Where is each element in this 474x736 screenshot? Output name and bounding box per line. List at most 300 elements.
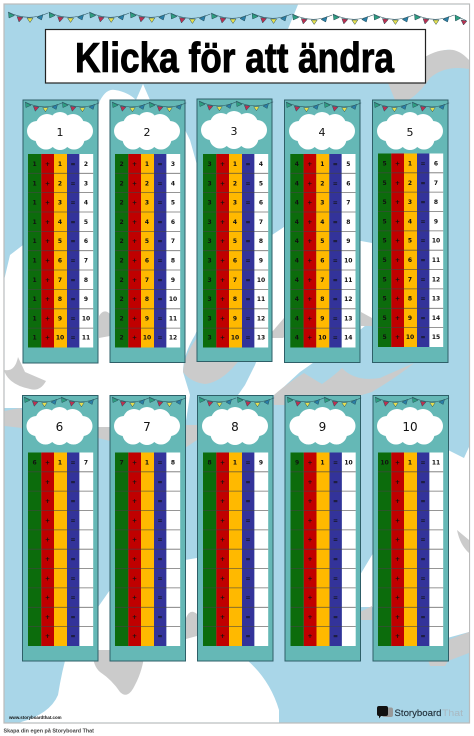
card 10: 1 [408, 460, 412, 466]
card 7: = [157, 498, 163, 505]
card 4: 9 [346, 238, 350, 245]
card 3: + [220, 219, 225, 226]
card 1: + [45, 335, 50, 342]
card 4: 4 [320, 219, 324, 226]
card 10: + [395, 460, 400, 466]
card 3: = [245, 335, 251, 342]
card 8: + [220, 498, 225, 505]
card 8: + [220, 556, 225, 563]
card 1: = [70, 277, 76, 284]
card 4: + [307, 258, 312, 264]
card 2: + [132, 258, 137, 264]
card 6: + [45, 575, 50, 582]
card 4: + [307, 200, 312, 207]
card 3: 3 [208, 161, 212, 168]
logo: Storyboard That [377, 706, 464, 718]
card 7: + [132, 614, 137, 621]
card 5: 9 [408, 315, 412, 322]
card 2: 5 [145, 238, 149, 245]
card 5: + [395, 160, 400, 168]
card 7: + [132, 479, 137, 486]
card 3: + [220, 180, 225, 187]
card 4: = [333, 200, 338, 207]
card 6: = [70, 517, 76, 524]
card 2: 8 [171, 258, 175, 264]
card 2: 2 [120, 335, 124, 342]
card 9: 10 [344, 460, 353, 466]
card 10: + [395, 595, 400, 602]
card 9: + [307, 556, 313, 563]
card 3: = [245, 258, 251, 264]
card 4: = [333, 238, 338, 245]
card 5: = [420, 180, 426, 187]
card 2: + [132, 277, 137, 284]
card 2: 1 [145, 161, 149, 168]
card 4: 6 [346, 180, 350, 187]
card 10: = [420, 614, 426, 621]
card 5: 5 [406, 126, 414, 139]
card 9: = [333, 479, 338, 486]
card 3: 3 [208, 180, 212, 187]
card 1: 1 [56, 126, 64, 139]
card 5 [372, 100, 449, 362]
card 10: + [395, 517, 400, 524]
card 5: 2 [408, 180, 412, 187]
card 5: 5 [383, 199, 387, 206]
card 1: + [45, 296, 50, 303]
card 6: = [70, 479, 76, 486]
card 4: = [333, 277, 338, 284]
card 2: 9 [171, 277, 175, 284]
card 10: = [420, 537, 426, 544]
card 2: 5 [171, 200, 175, 207]
card 7: = [157, 595, 163, 602]
card 1: 1 [33, 161, 37, 168]
card 1: 1 [33, 258, 37, 264]
card 1: 1 [33, 315, 37, 322]
card 7: + [132, 633, 137, 640]
card 1: 3 [58, 200, 62, 207]
card 5: 13 [432, 296, 440, 303]
card 8: + [220, 517, 225, 524]
card 10: + [395, 633, 400, 640]
card 3: 5 [233, 238, 237, 245]
card 5: 8 [434, 199, 438, 206]
card 8: = [245, 537, 251, 544]
card 4: + [307, 315, 312, 322]
card 6: 6 [33, 460, 37, 466]
card 7: = [157, 517, 163, 524]
card 1: + [45, 315, 50, 322]
card 1: 7 [58, 277, 62, 284]
card 3: 3 [208, 296, 212, 303]
card 6: + [45, 633, 50, 640]
card 5: 5 [383, 276, 387, 283]
card 4: 1 [320, 161, 324, 168]
logo: Storyboard That: That [442, 708, 464, 718]
card 4: = [333, 161, 338, 168]
card 3: 3 [208, 258, 212, 264]
card 2: 7 [145, 277, 149, 284]
card 2: 3 [145, 200, 149, 207]
card 6: 6 [56, 420, 63, 434]
card 7: 7 [143, 420, 151, 434]
card 8: = [245, 556, 251, 563]
card 3: 3 [208, 315, 212, 322]
card 5: 4 [408, 218, 412, 225]
card 6: = [70, 614, 76, 621]
card 4: = [333, 296, 338, 303]
card 10: = [420, 498, 426, 505]
top bunting [8, 12, 467, 25]
card 3: 8 [259, 238, 263, 245]
card 7: + [132, 460, 137, 466]
card 1: 4 [84, 200, 88, 207]
website url: www.storyboardthat.com [8, 715, 62, 720]
card 2: = [157, 161, 163, 168]
card 5: = [420, 257, 426, 264]
card 4: + [307, 335, 312, 342]
card 8: = [245, 633, 251, 640]
title: Klicka för att ändra [75, 34, 395, 81]
card 9: 9 [319, 420, 326, 434]
card 1: 1 [33, 335, 37, 342]
card 4: 10 [344, 258, 352, 264]
card 8: = [245, 517, 251, 524]
card 3: = [245, 200, 251, 207]
card 4: 10 [318, 335, 326, 342]
card 10: + [395, 479, 400, 486]
card 10: + [395, 556, 400, 563]
card 1: 2 [58, 180, 62, 187]
card 3: 10 [231, 335, 239, 342]
card 7: + [132, 556, 137, 563]
card 5: + [395, 199, 400, 206]
card 1: + [45, 200, 50, 207]
card 5: = [420, 334, 426, 341]
card 2: = [157, 258, 163, 264]
card 10: + [395, 575, 400, 582]
card 5: + [395, 180, 400, 187]
card 3: = [245, 296, 251, 303]
card 6: + [45, 614, 50, 621]
card 2: 10 [169, 296, 177, 303]
card 10: 10 [380, 460, 389, 466]
card 9: = [333, 633, 338, 640]
card 8: + [220, 460, 225, 466]
card 1: + [45, 277, 50, 284]
card 8: 8 [231, 420, 239, 434]
card 3: 8 [233, 296, 237, 303]
card 2: = [157, 335, 163, 342]
card 5: 5 [383, 238, 387, 245]
card 2: 4 [171, 180, 175, 187]
card 9: + [307, 633, 313, 640]
card 2: 6 [171, 219, 175, 226]
card 3: + [220, 161, 225, 168]
card 1: + [45, 219, 50, 226]
card 8: = [245, 614, 251, 621]
card 4: 4 [318, 126, 326, 139]
card 8: = [245, 460, 251, 466]
card 6: + [45, 460, 50, 466]
card 5: 5 [383, 180, 387, 187]
card 4: + [307, 296, 312, 303]
card 5: 12 [432, 276, 440, 283]
card 7: + [132, 537, 137, 544]
card 5: 5 [383, 257, 387, 264]
card 2: 12 [169, 335, 177, 342]
card 3: = [245, 238, 251, 245]
card 10: = [420, 517, 426, 524]
card 2: = [157, 277, 163, 284]
card 4: 8 [346, 219, 350, 226]
card 1: 1 [33, 219, 37, 226]
card 2: + [132, 219, 137, 226]
card 3: 13 [257, 335, 265, 342]
card 4: 4 [295, 219, 299, 226]
card 7: 8 [171, 460, 175, 466]
card 5: 5 [408, 238, 412, 245]
card 9: = [333, 517, 338, 524]
card 5: 15 [432, 334, 440, 341]
card 4: + [307, 277, 312, 284]
card 3: 3 [208, 238, 212, 245]
card 3: = [245, 180, 251, 187]
card 2: 2 [120, 296, 124, 303]
card 4: 4 [295, 296, 299, 303]
card 1: + [45, 238, 50, 245]
card 5: 5 [383, 160, 387, 168]
card 1: = [70, 161, 76, 168]
card 8: + [220, 595, 225, 602]
card 2: 2 [120, 161, 124, 168]
card 2: 2 [120, 277, 124, 284]
card 9: 1 [320, 460, 325, 466]
card 5: + [395, 257, 400, 264]
card 8: = [245, 498, 251, 505]
card 4: 4 [295, 277, 299, 284]
card 3 [197, 99, 273, 362]
card 1: = [70, 238, 76, 245]
card 3: 5 [259, 180, 263, 187]
card 2: + [132, 180, 137, 187]
card 7: 7 [120, 460, 124, 466]
card 1: 10 [56, 335, 64, 342]
card 9: + [307, 479, 313, 486]
card 9: + [307, 537, 313, 544]
card 10: = [420, 595, 426, 602]
card 1: 11 [82, 335, 90, 342]
card 4: 6 [320, 258, 324, 264]
card 3: + [220, 258, 225, 264]
card 8: + [220, 633, 225, 640]
card 5: 10 [432, 238, 440, 245]
card 10: = [420, 460, 426, 466]
card 1: = [70, 200, 76, 207]
card 5: 5 [383, 315, 387, 322]
card 7: 1 [145, 460, 149, 466]
card 2: + [132, 296, 137, 303]
card 2: = [157, 238, 163, 245]
card 1: 8 [58, 296, 62, 303]
card 7: = [157, 537, 163, 544]
card 5: 6 [434, 160, 438, 168]
card 8: = [245, 595, 251, 602]
card 5: + [395, 276, 400, 283]
card 1: = [70, 296, 76, 303]
card 2: 2 [120, 200, 124, 207]
card 4: + [307, 219, 312, 226]
card 5: 5 [383, 218, 387, 225]
card 1: = [70, 315, 76, 322]
card 5: 8 [408, 296, 412, 303]
card 3: 2 [233, 180, 237, 187]
card 5: 5 [383, 334, 387, 341]
card 2: 2 [120, 258, 124, 264]
card 6: + [45, 537, 50, 544]
card 10: = [420, 633, 426, 640]
card 8: = [245, 479, 251, 486]
card 6: = [70, 595, 76, 602]
card 2: 10 [143, 335, 151, 342]
logo: Storyboard That: Storyboard [394, 708, 442, 718]
card 5: + [395, 218, 400, 225]
card 2: 2 [144, 126, 150, 139]
card 5: 14 [432, 315, 440, 322]
card 5: 5 [383, 296, 387, 303]
card 2: 2 [145, 180, 149, 187]
card 10: + [395, 614, 400, 621]
card 2: 9 [145, 315, 149, 322]
card 5: = [420, 218, 426, 225]
card 5: 7 [408, 276, 412, 283]
card 8: 1 [233, 460, 237, 466]
card 4: 5 [320, 238, 324, 245]
card 4: + [307, 238, 312, 245]
card 4: + [307, 180, 312, 187]
card 6: 1 [58, 460, 62, 466]
card 6: = [70, 460, 76, 466]
card 2: = [157, 296, 163, 303]
card 5: = [420, 315, 426, 322]
card 7: = [157, 556, 163, 563]
card 6: + [45, 556, 50, 563]
card 4: 12 [344, 296, 352, 303]
card 1: = [70, 258, 76, 264]
card 1: 5 [58, 238, 62, 245]
card 1: 1 [33, 180, 37, 187]
card 1: + [45, 258, 50, 264]
card 2: 2 [120, 219, 124, 226]
card 2: 11 [169, 315, 177, 322]
card 3: + [220, 315, 225, 322]
card 3: + [220, 200, 225, 207]
card 8: 8 [208, 460, 212, 466]
card 10: 11 [432, 460, 440, 466]
card 5: + [395, 296, 400, 303]
card 5: = [420, 160, 426, 168]
card 5: 11 [432, 257, 440, 264]
card 3: 12 [257, 315, 265, 322]
card 8: + [220, 537, 225, 544]
card 2: = [157, 315, 163, 322]
card 1: + [45, 180, 50, 187]
card 7: = [157, 575, 163, 582]
card 4: 3 [320, 200, 324, 207]
card 3: = [245, 315, 251, 322]
card 9: = [333, 595, 338, 602]
card 6: = [70, 575, 76, 582]
card 3: 3 [233, 200, 237, 207]
card 7: + [132, 595, 137, 602]
card 3: + [220, 277, 225, 284]
card 1: 7 [84, 258, 88, 264]
card 2: 7 [171, 238, 175, 245]
card 9: = [333, 498, 338, 505]
card 7: = [157, 479, 163, 486]
card 7: + [132, 517, 137, 524]
card 2: + [132, 315, 137, 322]
card 2: = [157, 180, 163, 187]
card 7: + [132, 575, 137, 582]
card 5: + [395, 334, 400, 341]
card 2: 4 [145, 219, 149, 226]
card 3: 3 [230, 125, 238, 138]
card 1: 10 [82, 315, 90, 322]
card 2 [110, 100, 186, 362]
card 1: 5 [84, 219, 88, 226]
card 5: 7 [434, 180, 438, 187]
card 9: 9 [295, 460, 299, 466]
card 5: 3 [408, 199, 412, 206]
card 3: 3 [208, 335, 212, 342]
card 9: = [333, 537, 338, 544]
card 3: 4 [233, 219, 237, 226]
card 3: 10 [257, 277, 265, 284]
card 3: 3 [208, 277, 212, 284]
card 4: = [333, 180, 338, 187]
card 4: 4 [295, 161, 299, 168]
card 4: 4 [295, 238, 299, 245]
card 5: 10 [406, 334, 414, 341]
card 3: 4 [259, 161, 263, 168]
card 2: + [132, 335, 137, 342]
card 4: 4 [295, 180, 299, 187]
card 6: = [70, 498, 76, 505]
card 1: = [70, 335, 76, 342]
card 9 [285, 396, 361, 661]
card 4: 14 [344, 335, 352, 342]
card 4: 8 [320, 296, 324, 303]
card 7: + [132, 498, 137, 505]
card 1: 9 [84, 296, 88, 303]
card 10 [373, 396, 449, 661]
card 7 [110, 396, 186, 661]
card 3: = [245, 277, 251, 284]
card 2: = [157, 219, 163, 226]
card 3: 7 [233, 277, 237, 284]
card 3: 11 [257, 296, 265, 303]
card 3: 3 [208, 219, 212, 226]
card 10: = [420, 575, 426, 582]
card 5: = [420, 276, 426, 283]
card 6: + [45, 595, 50, 602]
card 2: = [157, 200, 163, 207]
card 8: + [220, 575, 225, 582]
card 3: 3 [208, 200, 212, 207]
card 9: + [307, 595, 313, 602]
